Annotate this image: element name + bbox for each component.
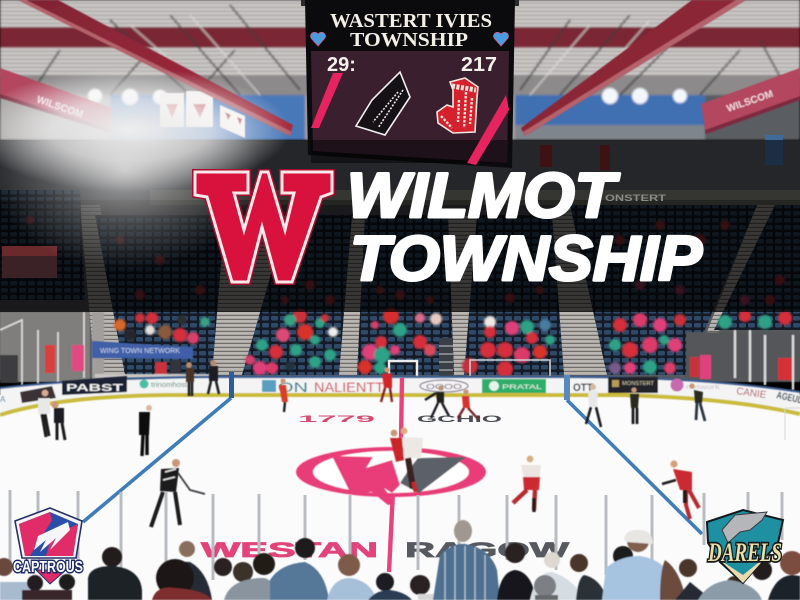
icon: heart left — [311, 32, 325, 46]
sponsor text on upper wall: ONSTERT — [605, 193, 667, 203]
crest base — [36, 570, 66, 584]
ad: oval logo: OOOO — [426, 384, 463, 391]
audience — [0, 520, 800, 600]
far boundary marks — [785, 408, 800, 440]
dark overlay band — [0, 140, 800, 312]
official pair far left — [38, 390, 65, 440]
rink glass posts — [10, 490, 782, 580]
ad: Nalientt: ON — [278, 379, 308, 395]
team logo right on scoreboard — [437, 78, 478, 133]
spectators right group — [602, 530, 800, 600]
pink banner right: WILSCOM — [725, 89, 775, 115]
team crest: Captrous — [13, 508, 83, 584]
hanging white banners — [160, 91, 245, 138]
jumbotron scoreboard — [301, 0, 519, 168]
red skater centre — [458, 389, 478, 419]
fans: section 6 — [718, 310, 792, 329]
dark side banner left — [2, 246, 57, 278]
upper concourse — [0, 135, 800, 380]
referee left — [139, 405, 152, 456]
ad: Canie: CANIE — [736, 386, 767, 401]
scoreboard title line 2: TOWNSHIP — [350, 29, 468, 51]
ad: Pabst: PABST — [66, 383, 123, 394]
crest wordmark: CAPTROUS — [13, 559, 83, 576]
ad: dark board: MONSTERT — [622, 381, 654, 387]
red skater right — [662, 460, 699, 519]
crowd: fans in upper seats — [26, 216, 785, 305]
team logo left on scoreboard — [356, 72, 410, 135]
title — [347, 161, 703, 294]
ad: OTT: OTT — [573, 382, 593, 394]
icon: heart right — [494, 32, 508, 46]
dark skater right — [630, 387, 639, 424]
score right: 217 — [461, 54, 497, 76]
ad: purple — [670, 378, 722, 392]
ad: left edge fragment: A — [0, 395, 6, 404]
ad: trinomhost — [140, 380, 187, 389]
ad: small dark board — [20, 386, 56, 403]
blue lines — [83, 372, 702, 534]
official centre — [425, 385, 449, 418]
pink banner right — [701, 68, 800, 134]
W logo — [195, 172, 332, 282]
ad: oval logo — [420, 380, 468, 392]
ice text: Ragow: RAGOW — [405, 539, 569, 562]
linesman skating — [151, 459, 205, 527]
crowd: fans in seats — [114, 308, 792, 377]
roof beam left — [18, 0, 293, 136]
centre face-off pair — [390, 428, 423, 492]
pink stripe left — [311, 73, 343, 128]
fans: section 2 — [245, 309, 338, 375]
blue arena banner: WING TOWN NETWORK — [100, 348, 180, 355]
officials at boards — [186, 360, 219, 396]
ice text: 1779: 1779 — [298, 414, 375, 424]
fans: section 5 — [609, 313, 686, 374]
roof beam right — [521, 0, 746, 136]
ad: green board — [482, 379, 546, 393]
team crest: Darels — [707, 510, 783, 583]
ad: Nalientt — [262, 379, 384, 395]
spectators left group — [0, 541, 253, 600]
white skater right — [586, 384, 601, 427]
ceiling — [0, 0, 800, 140]
goal frame far end — [389, 338, 550, 378]
crest eagle wing — [722, 512, 767, 543]
ice surface — [0, 395, 800, 600]
fans: section 4 — [462, 316, 555, 377]
scoreboard title: WASTERT IVIES — [330, 10, 492, 32]
glass and side stands left — [0, 312, 215, 385]
pink banner left: WILSCOM — [35, 94, 84, 121]
pink stripe right — [467, 95, 509, 165]
ad: trinomhost: trinomhost — [151, 382, 187, 389]
red and white skater — [513, 456, 541, 512]
players and officials — [38, 360, 705, 527]
dark skater far right — [689, 383, 705, 421]
pink banner left — [0, 68, 112, 133]
title line 1: WILMOT — [347, 161, 620, 231]
ad: Pabst — [62, 376, 127, 395]
centre red line — [389, 378, 402, 572]
fans: section 3 — [358, 308, 442, 374]
centre ice logo — [296, 447, 486, 505]
red player centre — [381, 367, 392, 402]
stairs and aisles — [80, 205, 775, 375]
glass and side stands right — [686, 330, 800, 390]
spotlight glare — [0, 68, 290, 270]
fans: section 1 — [114, 312, 210, 344]
ad: dark board — [608, 377, 658, 393]
ad: purple: network — [686, 385, 722, 391]
title line 2: TOWNSHIP — [350, 224, 703, 294]
spectators centre-left — [224, 538, 438, 600]
ice text: Gchio: GCHIO — [417, 414, 502, 424]
blue arena banner — [92, 341, 193, 359]
spectators centre-right — [497, 543, 608, 600]
centre spectator striped shirt — [433, 520, 500, 600]
ad: green board: PRATAL — [502, 385, 543, 391]
extra dimming of upper stands — [0, 200, 800, 312]
red player far left — [279, 378, 288, 412]
crest wing — [34, 522, 70, 552]
rink boards and ads — [0, 376, 800, 415]
score left: 29: — [327, 54, 356, 76]
ad: Nalientt: NALIENTT — [314, 379, 384, 395]
seating sections — [0, 190, 800, 375]
ice text: Westan: WESTAN — [201, 539, 378, 562]
